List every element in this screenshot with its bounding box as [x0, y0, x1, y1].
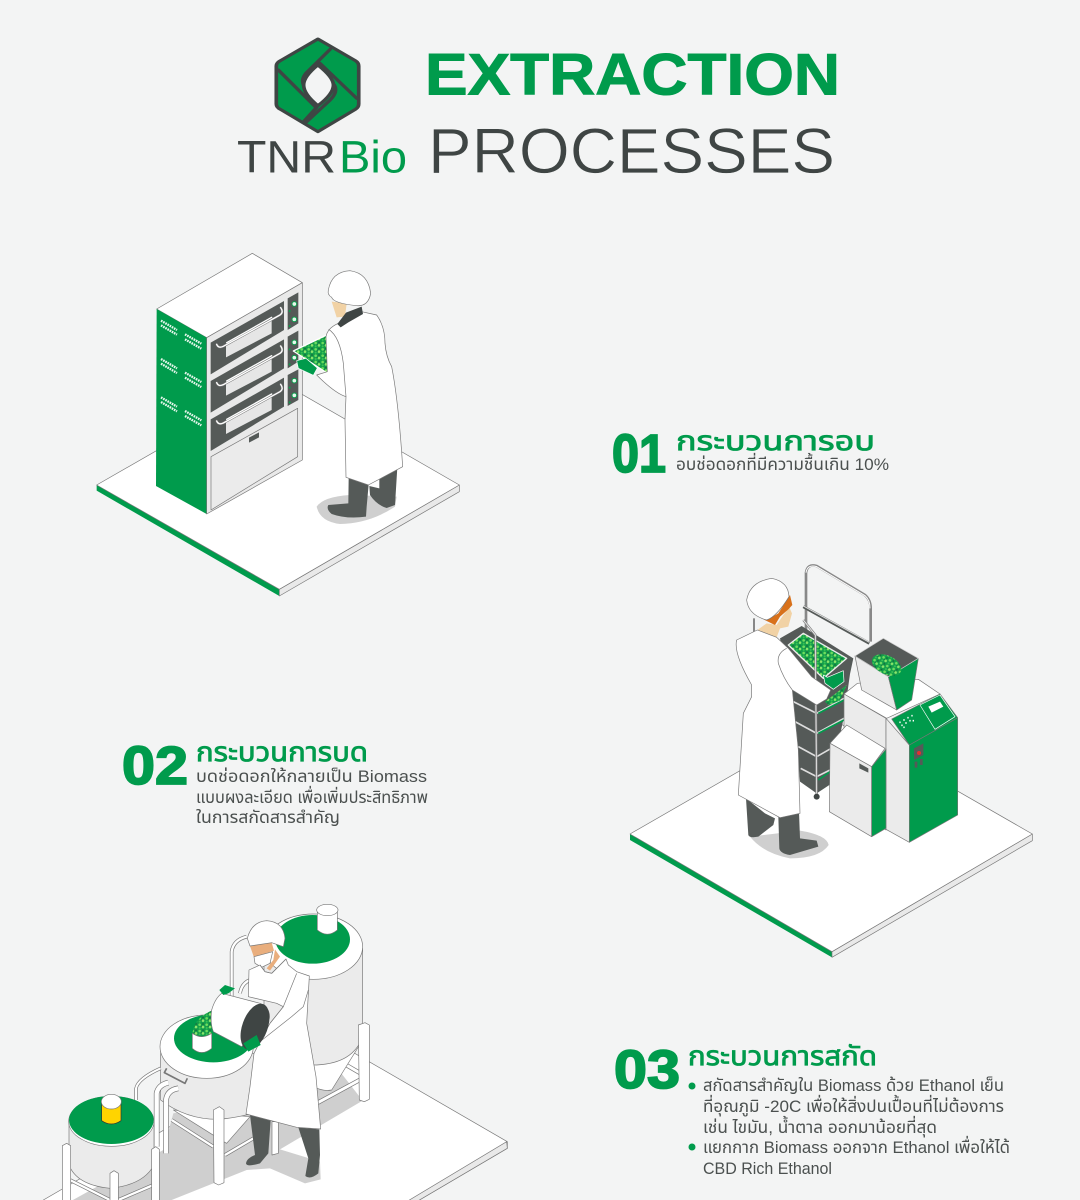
leaves falling into funnel — [192, 1011, 212, 1037]
legs — [746, 798, 818, 855]
coat — [736, 630, 831, 818]
text: step 02 — [122, 736, 428, 827]
hairnet — [247, 921, 285, 947]
gloves — [219, 985, 235, 995]
logo wordmark: TNR — [237, 132, 336, 182]
number 01: 01 — [612, 424, 666, 484]
glove and handful — [825, 685, 847, 705]
logo: TNRBio — [237, 39, 407, 182]
coat — [317, 312, 403, 485]
bullet list: สกัดสารสำคัญใน Biomass ด้วย Ethanol เย็น — [703, 1075, 1004, 1095]
small tank with yellow jar — [62, 1094, 159, 1200]
legs — [246, 1115, 320, 1177]
rack trolley — [754, 565, 871, 800]
skin and mask — [250, 943, 280, 971]
legs — [328, 467, 397, 518]
tray and leaves — [293, 335, 329, 374]
worker 2 — [736, 578, 847, 858]
worker 3 — [246, 921, 321, 1177]
control panels — [288, 292, 298, 406]
platform — [43, 1036, 507, 1200]
platform — [97, 381, 459, 596]
title: EXTRACTION — [425, 42, 840, 108]
grinder machine — [829, 638, 958, 842]
bullet list: เช่น ไขมัน, น้ำตาล ออกมาน้อยที่สุด — [703, 1115, 937, 1138]
control plate — [920, 695, 955, 729]
title: PROCESSES — [428, 115, 835, 187]
floor shadow — [72, 1072, 363, 1200]
icon: hexagon leaf mark — [276, 39, 359, 132]
oven doors — [211, 301, 284, 451]
bullet list: CBD Rich Ethanol — [703, 1159, 832, 1178]
description 02 — [196, 766, 428, 827]
coat — [246, 959, 321, 1129]
worker 1 — [293, 271, 403, 524]
illustration: extraction tanks scene — [43, 904, 507, 1200]
oven — [156, 253, 302, 514]
heading 01: กระบวนการอบ — [676, 426, 875, 456]
illustration: oven scene — [97, 253, 459, 596]
text: step 01 — [612, 424, 889, 484]
oven windows — [226, 320, 272, 434]
bullet list: ที่อุณภูมิ -20C เพื่อให้สิ่งปนเปื้อนที่ไม่ต้องการ — [703, 1094, 1004, 1118]
shadow — [750, 831, 829, 858]
scarf — [337, 307, 363, 327]
middle tank — [160, 1011, 278, 1185]
illustration: grinder scene — [630, 565, 1032, 957]
description 02: ในการสกัดสารสำคัญ — [196, 808, 340, 827]
skin and hair — [757, 607, 792, 637]
description 01: อบช่อดอกที่มีความชื้นเกิน 10% — [676, 452, 889, 474]
hopper — [855, 638, 918, 710]
bullet list — [688, 1075, 1010, 1178]
oven handles — [217, 308, 282, 424]
glove — [297, 358, 317, 375]
shadow — [317, 495, 397, 524]
platform — [630, 718, 1032, 957]
title — [425, 42, 840, 187]
connecting pipes — [136, 1068, 178, 1153]
bullet list: แยกกาก Biomass ออกจาก Ethanol เพื่อให้ได้ — [703, 1135, 1010, 1157]
description 02: แบบผงละเอียด เพื่อเพิ่มประสิทธิภาพ — [196, 785, 428, 807]
hairnet — [328, 271, 371, 306]
pipe behind tanks — [232, 937, 250, 1000]
vents — [161, 321, 201, 425]
number 03: 03 — [614, 1040, 680, 1100]
bucket — [211, 985, 275, 1054]
description 02: บดช่อดอกให้กลายเป็น Biomass — [196, 766, 427, 786]
large tank — [264, 904, 369, 1103]
lower drawer — [211, 408, 298, 510]
skin neck — [332, 302, 347, 317]
emergency switch — [914, 743, 923, 760]
logo wordmark: Bio — [339, 132, 407, 182]
heading 02: กระบวนการบด — [196, 737, 368, 767]
logo wordmark — [237, 132, 407, 182]
hairnet — [747, 578, 789, 620]
collection bin — [829, 725, 886, 837]
text: step 03 — [614, 1040, 1010, 1178]
heading 03: กระบวนการสกัด — [688, 1041, 877, 1071]
number 02: 02 — [122, 736, 188, 796]
leaves in tray — [788, 633, 847, 678]
